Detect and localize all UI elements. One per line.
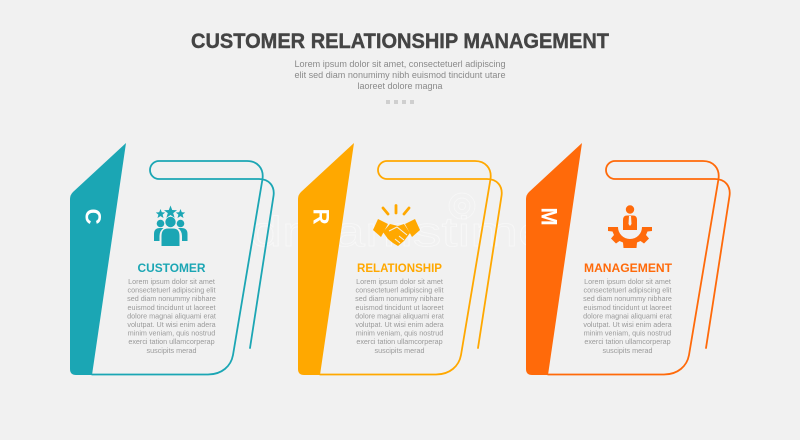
customer body text: exerci tation ullamcorperap bbox=[128, 337, 215, 346]
management body text bbox=[583, 277, 672, 355]
customer outline frame bbox=[92, 161, 274, 374]
customer body text: consectetuerl adipiscing elit bbox=[128, 286, 215, 295]
management body text: dolore magnai aliquami erat bbox=[583, 311, 672, 320]
subtitle text: elit sed diam nonumimy nibh euismod tincidunt utare bbox=[294, 70, 506, 80]
panel: customer bbox=[70, 143, 274, 375]
relationship body text: Lorem ipsum dolor sit amet bbox=[356, 277, 443, 286]
relationship letter: R bbox=[308, 209, 334, 225]
customer body text bbox=[127, 277, 216, 355]
management outline frame bbox=[548, 161, 730, 374]
customer body text: euismod tincidunt ut laoreet bbox=[128, 303, 215, 312]
title: CUSTOMER RELATIONSHIP MANAGEMENT bbox=[191, 30, 609, 53]
customer body text: Lorem ipsum dolor sit amet bbox=[128, 277, 215, 286]
icon: manager on gear bbox=[608, 205, 652, 248]
relationship body text: euismod tincidunt ut laoreet bbox=[356, 303, 443, 312]
management letter: M bbox=[536, 207, 562, 226]
watermark: dreamstime bbox=[250, 208, 550, 255]
subtitle text: laoreet dolore magna bbox=[358, 81, 442, 91]
customer body text: minim veniam, quis nostrud bbox=[128, 329, 215, 338]
customer body text: sed diam nonummy nibhare bbox=[127, 294, 216, 303]
management body text: consectetuerl adipiscing elit bbox=[584, 286, 671, 295]
management heading: MANAGEMENT bbox=[584, 261, 673, 275]
relationship body text: suscipits merad bbox=[375, 346, 424, 355]
icon: handshake bbox=[373, 206, 420, 246]
subtitle text: Lorem ipsum dolor sit amet, consectetuerl adipiscing bbox=[294, 59, 506, 69]
relationship body text: exerci tation ullamcorperap bbox=[356, 337, 443, 346]
management body text: euismod tincidunt ut laoreet bbox=[584, 303, 671, 312]
relationship body text: consectetuerl adipiscing elit bbox=[356, 286, 443, 295]
management colored tab bbox=[526, 143, 582, 375]
customer heading: CUSTOMER bbox=[138, 261, 206, 275]
customer body text: suscipits merad bbox=[147, 346, 196, 355]
management body text: exerci tation ullamcorperap bbox=[584, 337, 671, 346]
panel: management bbox=[526, 143, 730, 375]
relationship body text: minim veniam, quis nostrud bbox=[356, 329, 443, 338]
relationship colored tab bbox=[298, 143, 354, 375]
customer body text: dolore magnai aliquami erat bbox=[127, 311, 216, 320]
relationship body text: dolore magnai aliquami erat bbox=[355, 311, 444, 320]
icon: customer group with stars bbox=[154, 206, 188, 246]
subtitle text bbox=[294, 59, 506, 91]
management body text: suscipits merad bbox=[603, 346, 652, 355]
relationship body text: sed diam nonummy nibhare bbox=[355, 294, 444, 303]
customer colored tab bbox=[70, 143, 126, 375]
customer body text: volutpat. Ut wisi enim adera bbox=[127, 320, 216, 329]
panel: relationship bbox=[298, 143, 502, 375]
watermark bbox=[250, 193, 550, 255]
decorative dot row bbox=[386, 100, 414, 104]
relationship outline frame bbox=[320, 161, 502, 374]
customer letter: C bbox=[80, 209, 106, 225]
management body text: volutpat. Ut wisi enim adera bbox=[583, 320, 672, 329]
management body text: Lorem ipsum dolor sit amet bbox=[584, 277, 671, 286]
management body text: minim veniam, quis nostrud bbox=[584, 329, 671, 338]
relationship heading: RELATIONSHIP bbox=[357, 261, 442, 275]
relationship body text: volutpat. Ut wisi enim adera bbox=[355, 320, 444, 329]
management body text: sed diam nonummy nibhare bbox=[583, 294, 672, 303]
relationship body text bbox=[355, 277, 444, 355]
